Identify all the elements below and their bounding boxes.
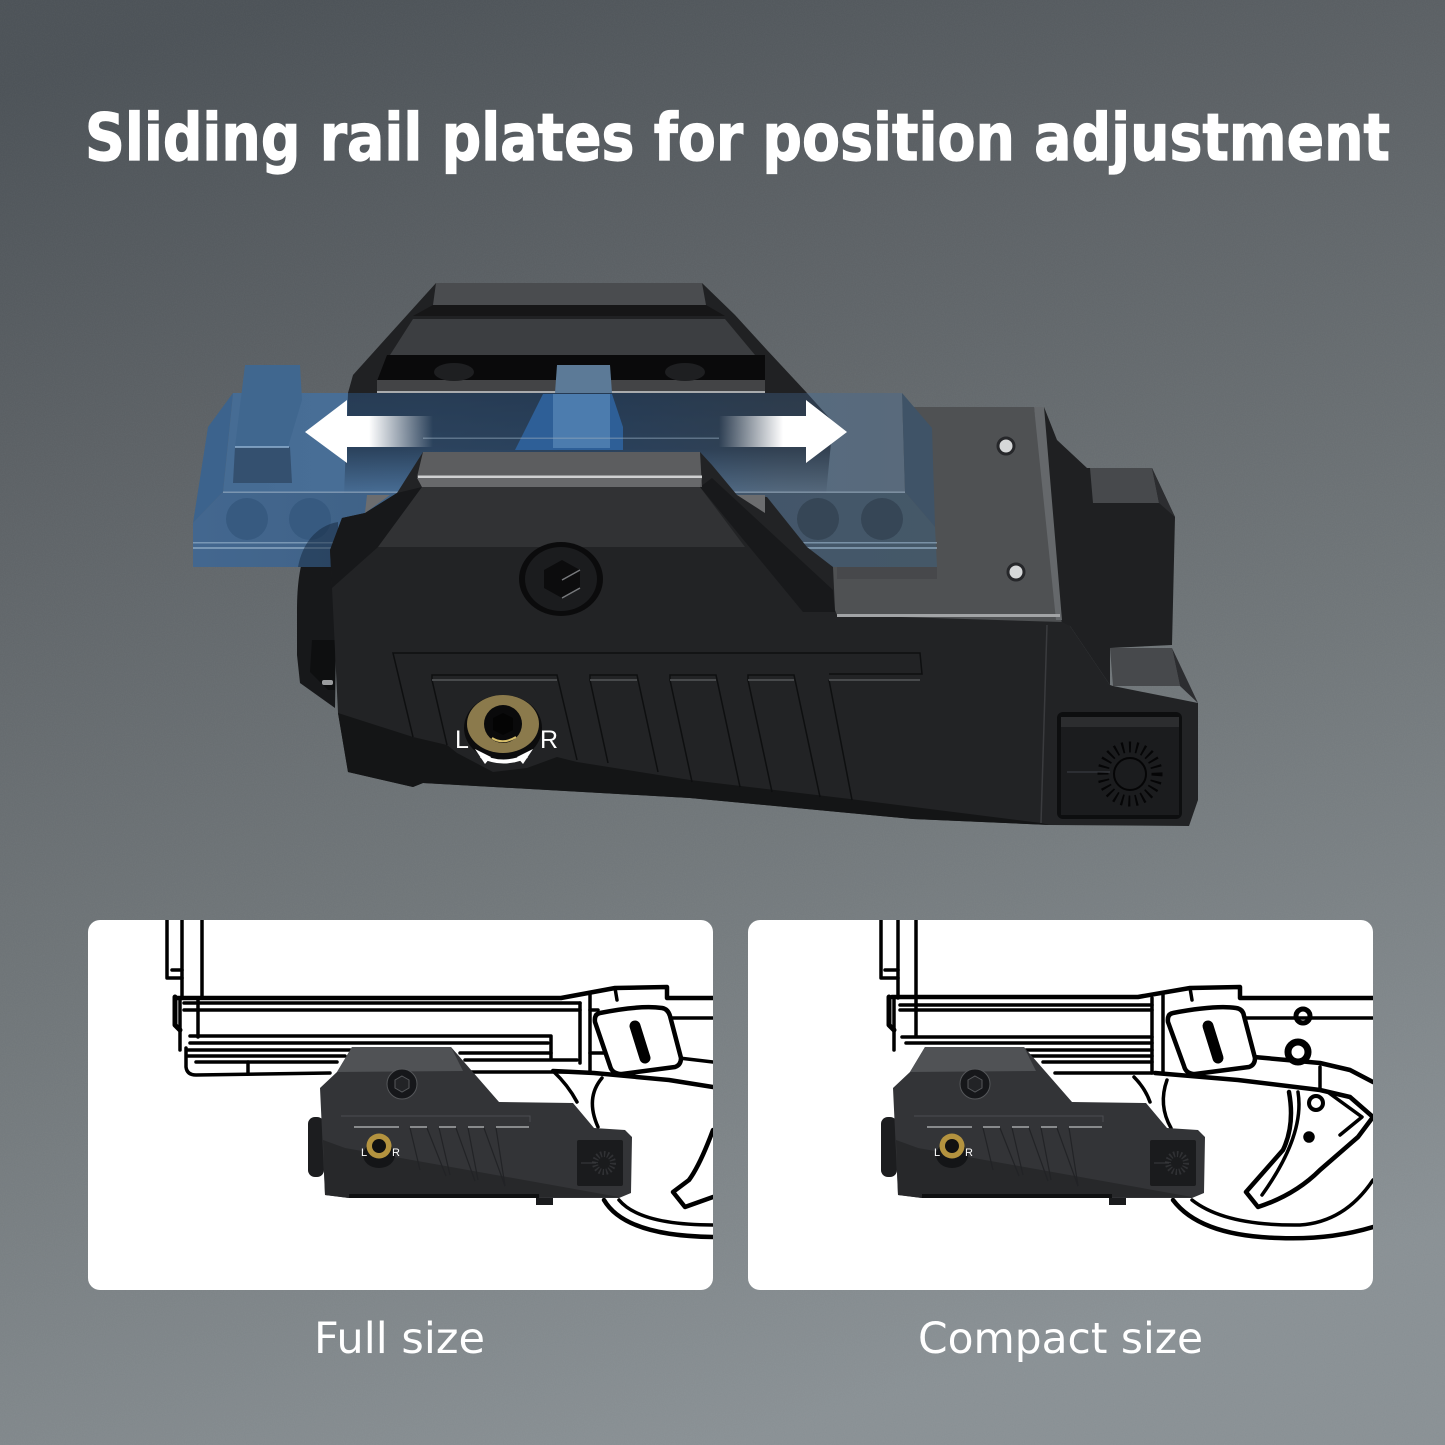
hex screw <box>519 542 603 616</box>
double-headed arrow <box>305 400 847 463</box>
rear lower lug <box>1110 648 1180 686</box>
blue sliding rail plate <box>193 365 937 567</box>
front lens housing <box>297 522 338 708</box>
caption: full size: Full size <box>314 1314 485 1364</box>
left lug <box>235 365 302 447</box>
panel: full size <box>88 920 713 1290</box>
plate right side <box>902 393 935 527</box>
pin screws <box>998 438 1024 580</box>
plate top face <box>223 393 905 492</box>
pistol outline: full size <box>167 920 713 1237</box>
black slope band <box>700 478 835 612</box>
seam <box>1041 625 1047 823</box>
upper facet <box>378 487 745 547</box>
gray top plate <box>790 407 1062 625</box>
side gray tabs <box>365 495 390 513</box>
left chamfer <box>330 487 422 588</box>
rear sight block <box>1034 407 1175 685</box>
brass windage adjuster with L R marks: R <box>540 726 558 754</box>
rear rail mount <box>345 283 833 500</box>
plate front face <box>193 492 937 567</box>
plate shadow <box>837 567 937 579</box>
panel: compact size <box>748 920 1373 1290</box>
highlight on step <box>837 614 1060 617</box>
small device: compact size: L <box>934 1147 940 1159</box>
ribbed recess <box>393 653 922 800</box>
main product illustration <box>193 283 1198 826</box>
small device: compact size <box>881 1047 1205 1205</box>
brass windage adjuster with L R marks: L <box>455 726 469 754</box>
mounting holes <box>226 498 268 540</box>
bottom wedge <box>338 713 1050 825</box>
plate guide lines <box>423 438 719 439</box>
plate left side <box>193 393 233 523</box>
switch with sun icon <box>1057 712 1182 819</box>
rail seen through plate <box>344 393 833 495</box>
lens seen through plate <box>298 522 338 567</box>
front body <box>330 452 1198 826</box>
small device: full size: L <box>361 1147 367 1159</box>
brass windage adjuster with L R marks <box>455 695 558 764</box>
small device: full size: R <box>392 1147 400 1159</box>
top face <box>417 452 702 487</box>
pistol outline: compact size <box>881 920 1373 1238</box>
small device: compact size: R <box>965 1147 973 1159</box>
center lug <box>555 365 612 393</box>
caption: compact size: Compact size <box>918 1314 1203 1364</box>
small device: full size <box>308 1047 632 1205</box>
